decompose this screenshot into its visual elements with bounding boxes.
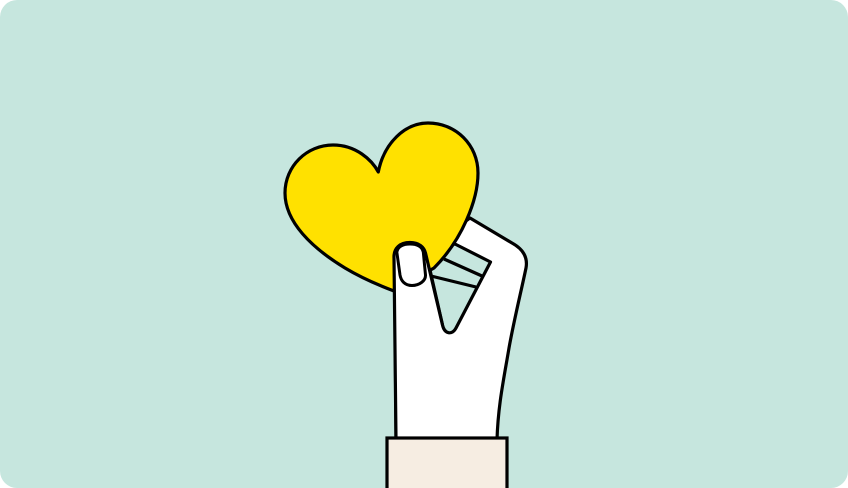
icon: thumb [394, 242, 441, 437]
icon: thumb outline [394, 242, 442, 440]
icon: yellow heart [285, 123, 478, 291]
icon: finger lines [431, 259, 482, 287]
icon: thumbnail [397, 244, 426, 286]
icon: gap between fingers [425, 244, 490, 333]
icon: back of hand [395, 218, 526, 440]
icon: shirt cuff [387, 438, 507, 488]
